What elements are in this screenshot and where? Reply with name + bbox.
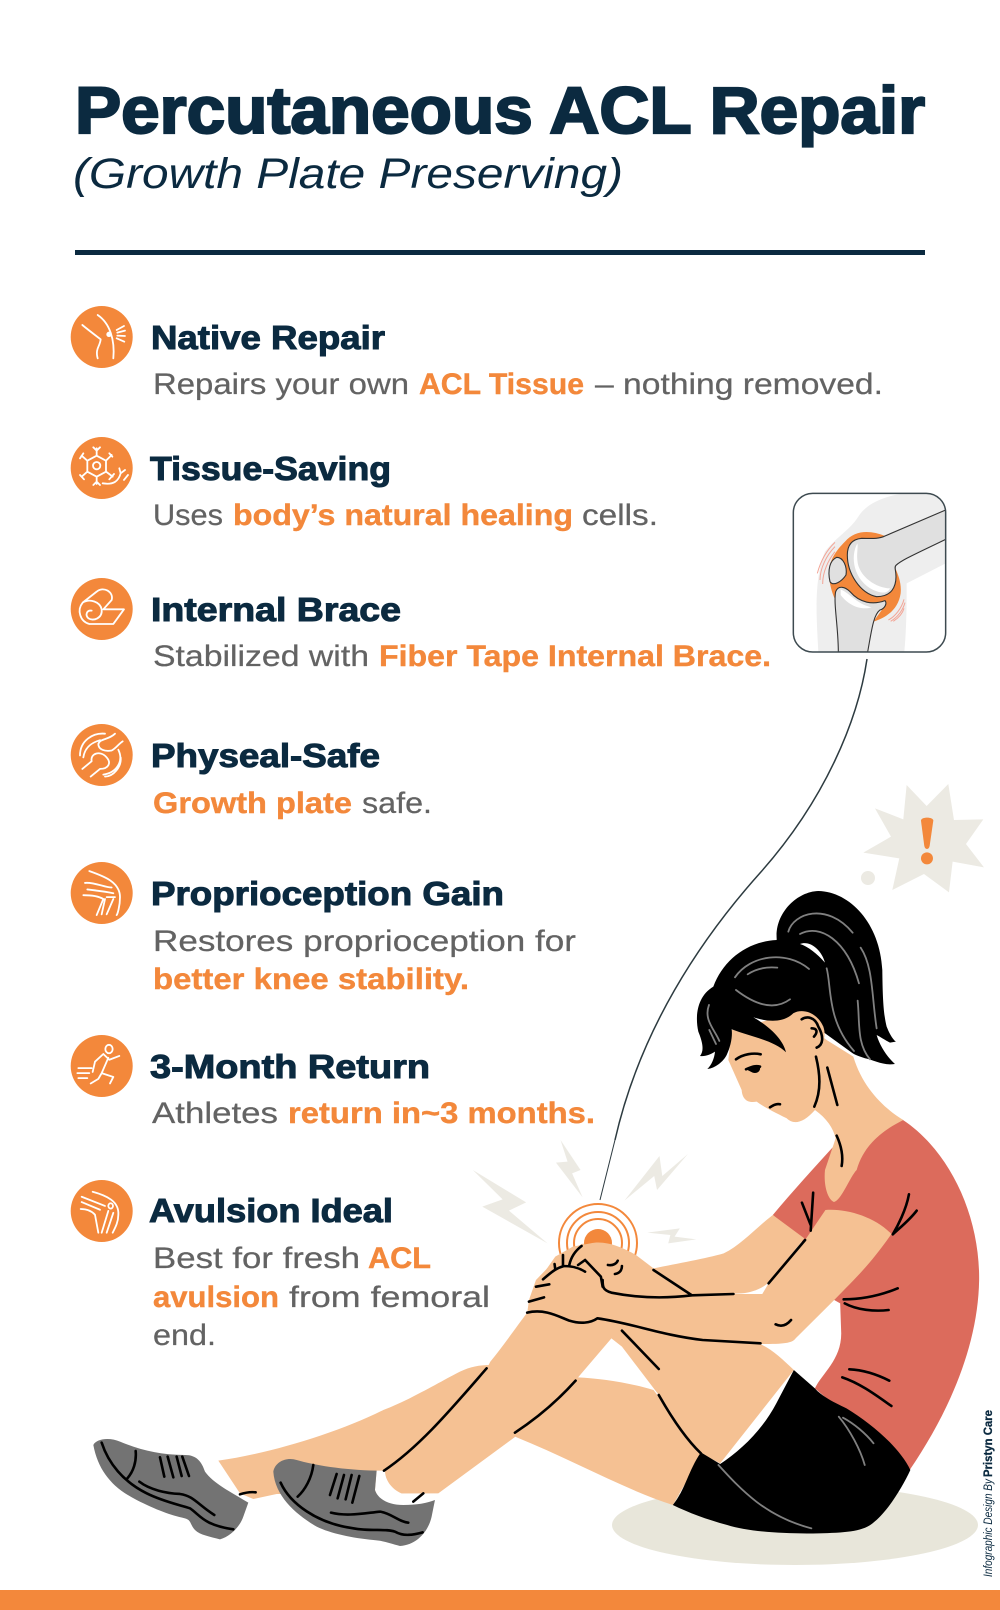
icon: knee joint [71,306,133,368]
description: Repairs your own [153,368,409,401]
callout line from knee to inset [600,659,867,1200]
description [153,368,883,401]
icon: bent knee [71,862,133,924]
item: Internal Brace [71,578,771,673]
description [153,1242,490,1352]
footer bar [0,1590,1000,1610]
header divider [75,250,925,255]
description: Restores proprioception for [153,925,576,958]
near arm and hands [527,1210,891,1344]
person sitting holding knee [93,891,979,1546]
shorts highlights [718,1417,874,1528]
description [153,925,576,996]
shoes and socks [93,1368,487,1546]
icon: growth plate [71,724,133,786]
icon: nerve cell [71,437,133,499]
shorts [673,1370,910,1533]
body contour lines [515,1140,917,1453]
credit: Infographic Design By [981,1478,995,1577]
pain lightning bolts [473,1140,696,1243]
description [152,1097,595,1130]
heading: Internal Brace [151,591,401,628]
torso body shapes [383,1120,979,1533]
heading: 3-Month Return [150,1048,430,1085]
description: safe. [362,787,432,820]
description: Best for fresh [153,1242,360,1275]
icon: runner [71,1035,133,1097]
item: 3-Month Return [71,1035,595,1130]
description: Uses [153,499,223,532]
description: Athletes [152,1097,278,1130]
near leg [383,1242,794,1493]
description: – nothing removed. [595,368,883,401]
title: Percutaneous ACL Repair [75,73,925,147]
inset: knee joint anatomy [793,493,946,652]
description: cells. [582,499,658,532]
description: Fiber Tape Internal Brace. [379,640,771,673]
heading: Proprioception Gain [151,875,504,912]
description: ACL Tissue [419,368,584,401]
description: Growth plate [153,787,352,820]
item: Native Repair [71,306,883,401]
description [153,499,658,532]
icon: tape roll [71,578,133,640]
description: return in~3 months. [288,1097,595,1130]
item: Tissue-Saving [71,437,658,532]
description: avulsion [153,1281,279,1314]
item: Avulsion Ideal [71,1180,490,1352]
far leg [218,1365,515,1499]
credit: Pristyn Care [981,1410,995,1477]
head and hair [697,891,903,1202]
heading: Physeal-Safe [151,737,380,774]
t-shirt [773,1120,979,1470]
subtitle: (Growth Plate Preserving) [73,150,623,198]
alert burst with exclamation [861,784,984,892]
floor shadow [612,1485,978,1565]
description: end. [153,1319,216,1352]
description [153,640,771,673]
far thigh [492,1377,703,1505]
heading: Native Repair [151,319,385,356]
item: Proprioception Gain [71,862,576,996]
description: body’s natural healing [233,499,573,532]
description: better knee stability. [153,963,469,996]
icon: knee bones [71,1180,133,1242]
far arm [654,1215,804,1297]
description [153,787,432,820]
description: Stabilized with [153,640,369,673]
heading: Tissue-Saving [150,450,391,487]
pain target rings [559,1204,637,1282]
heading: Avulsion Ideal [149,1192,393,1229]
description: from femoral [289,1281,490,1314]
description: ACL [368,1242,431,1275]
item: Physeal-Safe [71,724,432,820]
